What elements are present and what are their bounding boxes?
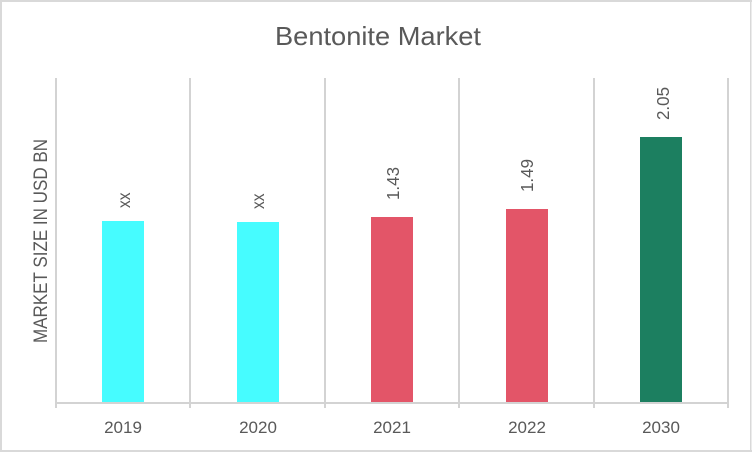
- year 2020: 2020: [239, 418, 277, 437]
- x-axis labels: [104, 418, 680, 437]
- y-axis label: MARKET SIZE IN USD BN: [31, 139, 52, 343]
- year 2022: 2022: [508, 418, 546, 437]
- label 2030 value: 2.05: [653, 87, 673, 120]
- label 2019 value: xx: [114, 192, 134, 208]
- data labels: [114, 87, 673, 209]
- bar 2019: [102, 221, 144, 402]
- bar 2020: [237, 222, 279, 402]
- label 2022 value: 1.49: [517, 159, 537, 192]
- title: Bentonite Market: [275, 21, 482, 51]
- bar 2030: [640, 137, 682, 402]
- year 2030: 2030: [642, 418, 680, 437]
- year 2021: 2021: [373, 418, 411, 437]
- bars: [102, 137, 682, 402]
- bar 2022: [506, 209, 548, 402]
- label 2021 value: 1.43: [383, 167, 403, 200]
- bar 2021: [371, 217, 413, 402]
- year 2019: 2019: [104, 418, 142, 437]
- label 2020 value: xx: [248, 193, 268, 209]
